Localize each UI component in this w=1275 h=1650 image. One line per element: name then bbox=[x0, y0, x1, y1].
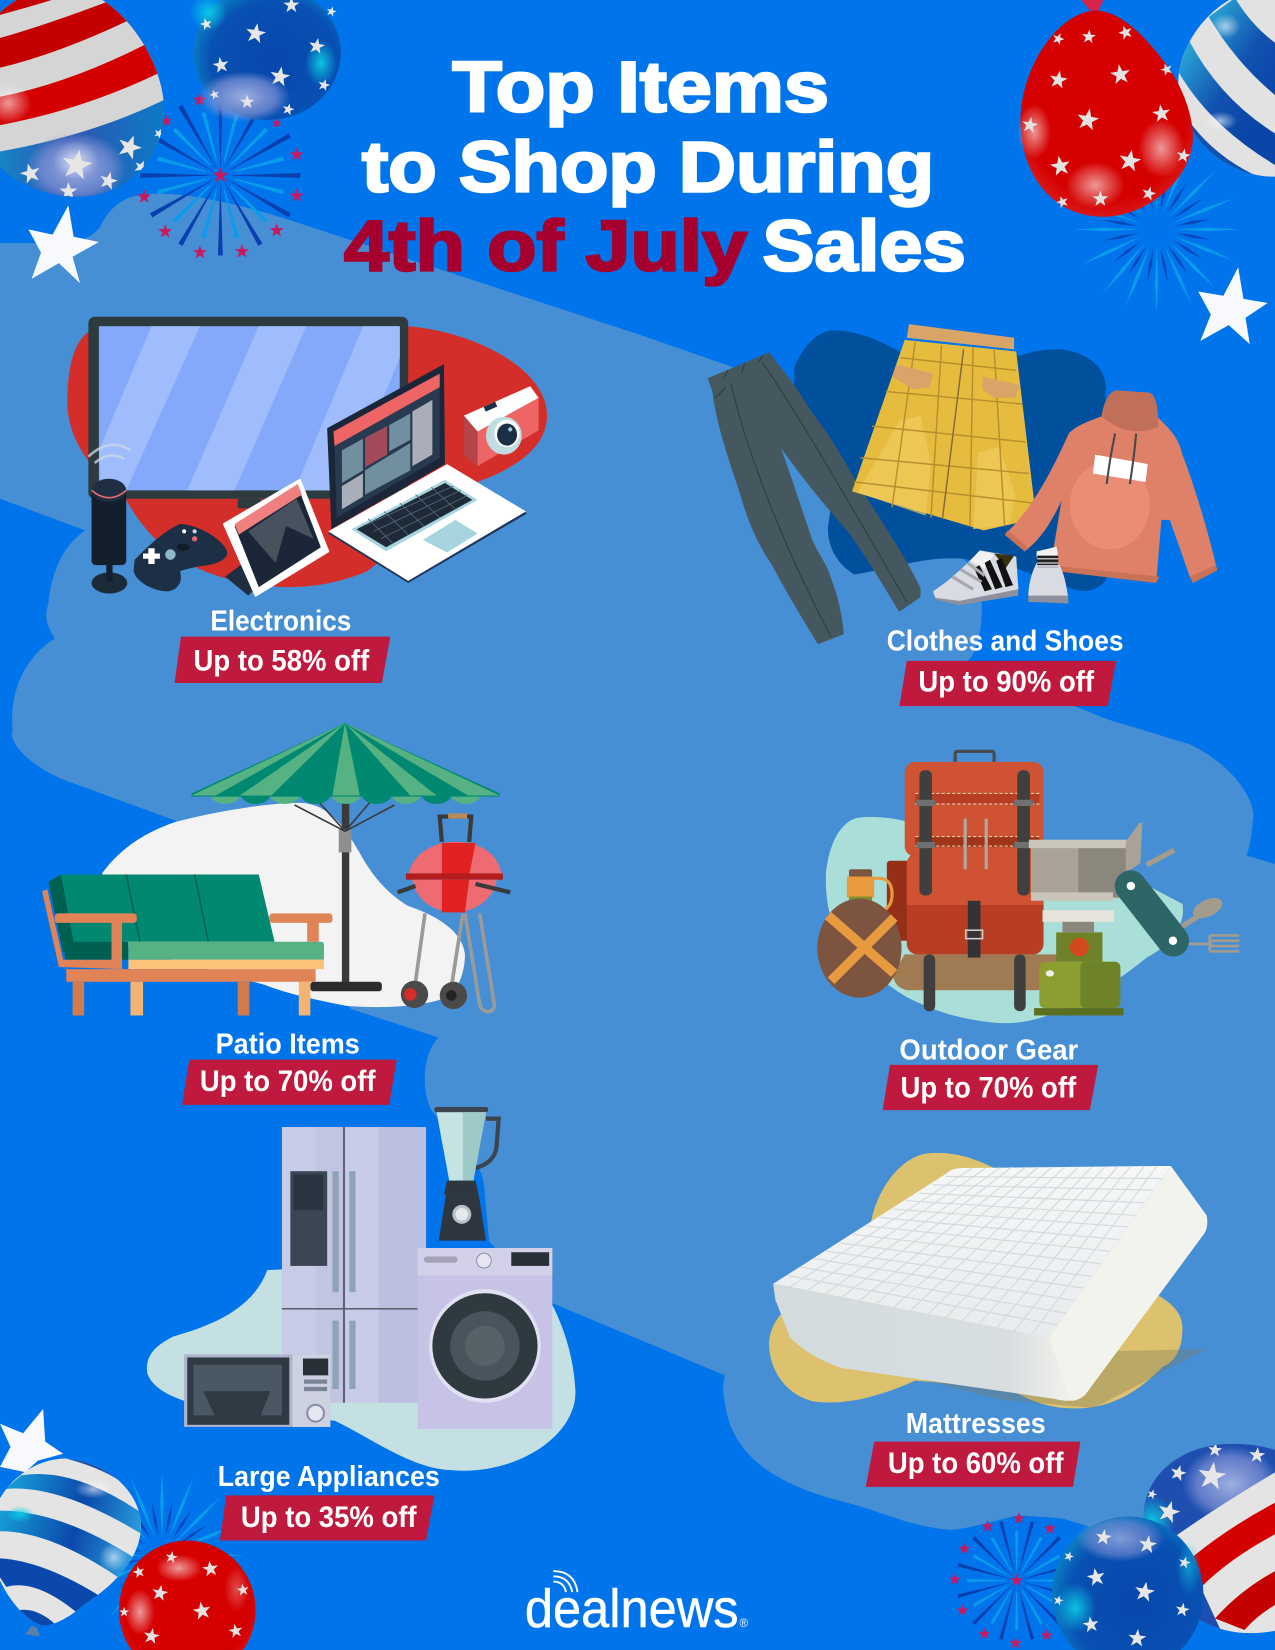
sneakers bbox=[933, 547, 1068, 605]
label: outdoor gear: Outdoor Gear bbox=[899, 1035, 1078, 1067]
logo: dealnews: dealnews bbox=[525, 1579, 738, 1639]
white star top left bbox=[28, 205, 99, 283]
firework: top left bbox=[137, 93, 304, 259]
label: mattresses: Up to 60% off bbox=[888, 1447, 1064, 1480]
title: Top Items bbox=[452, 48, 829, 128]
game controller bbox=[134, 524, 227, 591]
label: clothes and shoes bbox=[887, 625, 1124, 706]
balloon: striped top right bbox=[1178, 0, 1275, 177]
backpack bbox=[887, 751, 1044, 1011]
blender bbox=[434, 1107, 499, 1241]
balloon: blue with stars top bbox=[189, 0, 341, 122]
mint blob bbox=[147, 1263, 575, 1471]
balloon: blue bottom right bbox=[1052, 1515, 1203, 1650]
panel: outdoor gear bbox=[817, 751, 1239, 1023]
balloon: striped bottom left bbox=[0, 1458, 141, 1626]
balloon: flag bottom right bbox=[1144, 1444, 1275, 1634]
hoodie bbox=[1005, 390, 1217, 583]
laptop bbox=[327, 364, 527, 583]
label: clothes and shoes: Up to 90% off bbox=[918, 665, 1094, 698]
skirt bbox=[852, 324, 1036, 530]
fridge bbox=[282, 1127, 426, 1403]
label: patio items: Up to 70% off bbox=[200, 1065, 376, 1098]
balloon knot bottom left bbox=[25, 1626, 40, 1636]
camera bbox=[464, 386, 539, 466]
bedroll bbox=[893, 954, 1057, 990]
yellow blob bbox=[769, 1153, 1182, 1408]
firework: top right bbox=[1074, 146, 1240, 313]
title bbox=[344, 48, 966, 286]
panel: electronics bbox=[67, 317, 547, 596]
shadow bbox=[834, 1349, 1207, 1408]
tablet bbox=[224, 480, 328, 596]
panel: patio items bbox=[42, 723, 510, 1015]
firework: bottom right bbox=[942, 1506, 1091, 1650]
firework: bottom left bbox=[79, 1472, 245, 1638]
label: outdoor gear bbox=[883, 1035, 1098, 1110]
label: mattresses bbox=[866, 1408, 1080, 1487]
canteen bbox=[817, 869, 902, 998]
title: to Shop During bbox=[362, 128, 934, 208]
balloon: red bottom left bbox=[119, 1541, 256, 1650]
microwave bbox=[184, 1354, 330, 1427]
white blob bbox=[102, 803, 465, 1007]
sofa bbox=[42, 874, 332, 1015]
label: mattresses: Mattresses bbox=[906, 1408, 1046, 1440]
label: electronics: Electronics bbox=[210, 605, 351, 637]
label: clothes and shoes: Clothes and Shoes bbox=[887, 625, 1124, 657]
balloon: red top right bbox=[1017, 0, 1193, 217]
title: Sales bbox=[763, 206, 966, 286]
white star bottom left bbox=[0, 1409, 63, 1472]
monitor bbox=[88, 317, 408, 508]
label: outdoor gear: Up to 70% off bbox=[900, 1072, 1076, 1105]
label: large appliances bbox=[218, 1461, 440, 1541]
pocket knife and utensils bbox=[1108, 850, 1239, 963]
label: patio items: Patio Items bbox=[216, 1028, 360, 1060]
logo: dealnews: ® bbox=[740, 1618, 749, 1630]
smart speaker bbox=[88, 445, 130, 593]
label: patio items bbox=[182, 1028, 397, 1105]
umbrella bbox=[191, 723, 500, 991]
cook pot bbox=[1029, 823, 1142, 901]
white star top right bbox=[1198, 267, 1268, 344]
washing machine bbox=[418, 1248, 552, 1429]
pants bbox=[709, 354, 919, 643]
title: 4th of July bbox=[344, 206, 747, 286]
panel: large appliances bbox=[147, 1107, 575, 1471]
camping stove bbox=[1034, 910, 1124, 1015]
label: electronics: Up to 58% off bbox=[194, 644, 369, 677]
red blob bbox=[67, 326, 547, 587]
label: electronics bbox=[175, 605, 390, 683]
label: large appliances: Up to 35% off bbox=[241, 1501, 417, 1534]
panel: mattresses bbox=[769, 1153, 1207, 1408]
label: large appliances: Large Appliances bbox=[218, 1461, 440, 1493]
dark blue blob bbox=[794, 330, 1107, 591]
mattress bbox=[773, 1166, 1207, 1401]
panel: clothes and shoes bbox=[709, 324, 1217, 643]
mint blob bbox=[826, 817, 1183, 1023]
grill bbox=[398, 813, 510, 1012]
balloon: striped top left bbox=[0, 0, 164, 197]
